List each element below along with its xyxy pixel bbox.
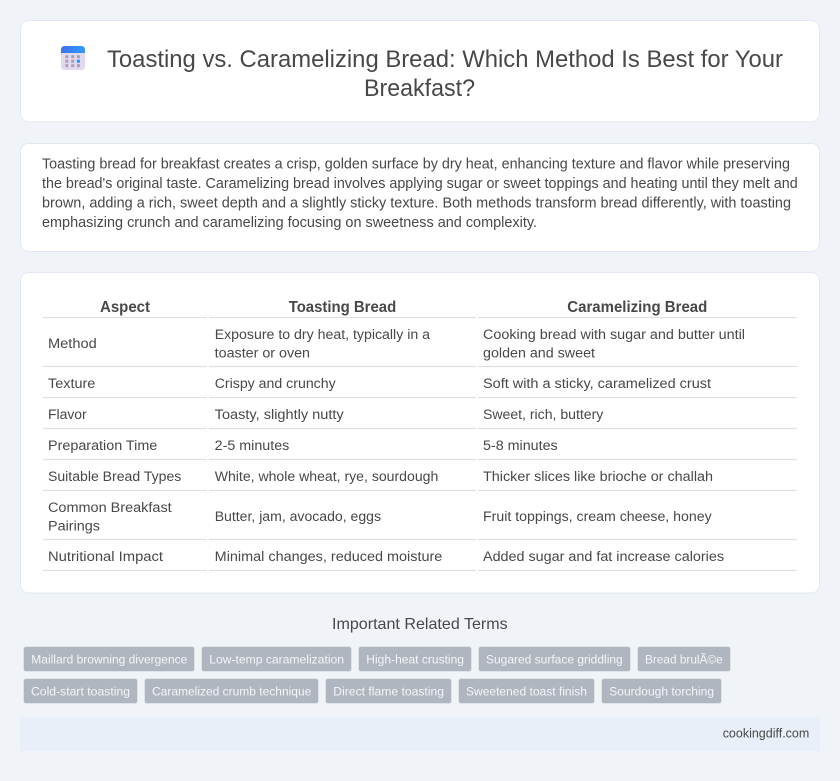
table row: suitable bread types: Thicker slices like brioche or challah — [483, 469, 713, 485]
table row: method: Method — [48, 336, 97, 352]
table row: texture: Texture — [48, 376, 95, 392]
table row: flavor: Toasty, slightly nutty — [215, 407, 345, 423]
tag: Bread brulÃ©e — [645, 652, 723, 666]
text block: summary: brown, adding a rich, sweet depth and a slightly sticky texture. Both methods transform bread differently, with toasting — [42, 196, 791, 212]
table row: texture: Soft with a sticky, caramelized crust — [483, 376, 711, 392]
table row: suitable bread types — [48, 469, 713, 485]
table row: suitable bread types: White, whole wheat, rye, sourdough — [215, 469, 438, 485]
heading: important related terms: Important Related Terms — [332, 616, 508, 633]
table row: method: golden and sweet — [483, 346, 595, 362]
table row: method — [48, 327, 745, 362]
title: Breakfast? — [364, 75, 475, 102]
tag — [24, 678, 138, 704]
panel: header — [20, 20, 820, 122]
table row: common breakfast pairings: Common Breakfast — [48, 500, 172, 516]
table row: flavor: Flavor — [48, 407, 87, 423]
tag — [478, 646, 630, 672]
table row: preparation time — [48, 438, 558, 454]
tag: Cold-start toasting — [31, 684, 130, 698]
table row: method: Cooking bread with sugar and butter until — [483, 327, 745, 343]
table row: suitable bread types: Suitable Bread Types — [48, 469, 181, 485]
table header row: Toasting Bread — [289, 299, 396, 316]
table row: flavor: Sweet, rich, buttery — [483, 407, 604, 423]
tag list — [24, 646, 730, 704]
table row: method: toaster or oven — [215, 346, 310, 362]
panel: summary paragraph — [20, 144, 820, 252]
table row: nutritional impact: Added sugar and fat increase calories — [483, 549, 724, 565]
tag — [458, 678, 594, 704]
table row: preparation time: Preparation Time — [48, 438, 157, 454]
footer — [20, 717, 820, 751]
tag: High-heat crusting — [366, 652, 464, 666]
text block: summary: emphasizing crunch and caramelizing focusing on sweetness and complexity. — [42, 215, 537, 231]
table row: texture — [48, 376, 711, 392]
text block: summary — [42, 156, 798, 231]
tag — [358, 646, 472, 672]
tag — [638, 646, 730, 672]
tag — [24, 646, 194, 672]
table row: flavor — [48, 407, 604, 423]
tag — [144, 678, 318, 704]
table row: common breakfast pairings — [48, 500, 713, 534]
footer: cookingdiff.com — [723, 726, 809, 740]
tag — [602, 678, 722, 704]
table row: nutritional impact: Nutritional Impact — [48, 549, 163, 565]
tag: Sweetened toast finish — [466, 684, 587, 698]
table header row — [100, 299, 707, 316]
tag: Low-temp caramelization — [209, 652, 344, 666]
table row: nutritional impact — [48, 549, 724, 565]
table row: common breakfast pairings: Fruit toppings, cream cheese, honey — [483, 509, 713, 525]
table row: common breakfast pairings: Butter, jam, avocado, eggs — [215, 509, 381, 525]
table row: method: Exposure to dry heat, typically in a — [215, 327, 430, 343]
title — [107, 46, 783, 102]
table row: common breakfast pairings: Pairings — [48, 518, 100, 534]
tag: Sugared surface griddling — [486, 652, 623, 666]
icon: calendar — [61, 46, 85, 70]
table header row: Aspect — [100, 299, 151, 316]
tag: Direct flame toasting — [333, 684, 444, 698]
table row: preparation time: 2-5 minutes — [215, 438, 289, 454]
text block: summary: the bread's original taste. Caramelizing bread involves applying sugar or sweet toppings and heating until they melt and — [42, 176, 798, 192]
tag: Maillard browning divergence — [31, 652, 187, 666]
table row: nutritional impact: Minimal changes, reduced moisture — [215, 549, 442, 565]
tag — [326, 678, 452, 704]
table row: texture: Crispy and crunchy — [215, 376, 337, 392]
table row: preparation time: 5-8 minutes — [483, 438, 558, 454]
tag — [202, 646, 352, 672]
tag: Caramelized crumb technique — [152, 684, 311, 698]
title: Toasting vs. Caramelizing Bread: Which Method Is Best for Your — [107, 46, 783, 73]
text block: summary: Toasting bread for breakfast creates a crisp, golden surface by dry heat, enhancing texture and flavor while preserving — [42, 156, 790, 172]
tag: Sourdough torching — [609, 684, 714, 698]
table header row: Caramelizing Bread — [567, 299, 707, 316]
panel: comparison table — [20, 272, 820, 593]
